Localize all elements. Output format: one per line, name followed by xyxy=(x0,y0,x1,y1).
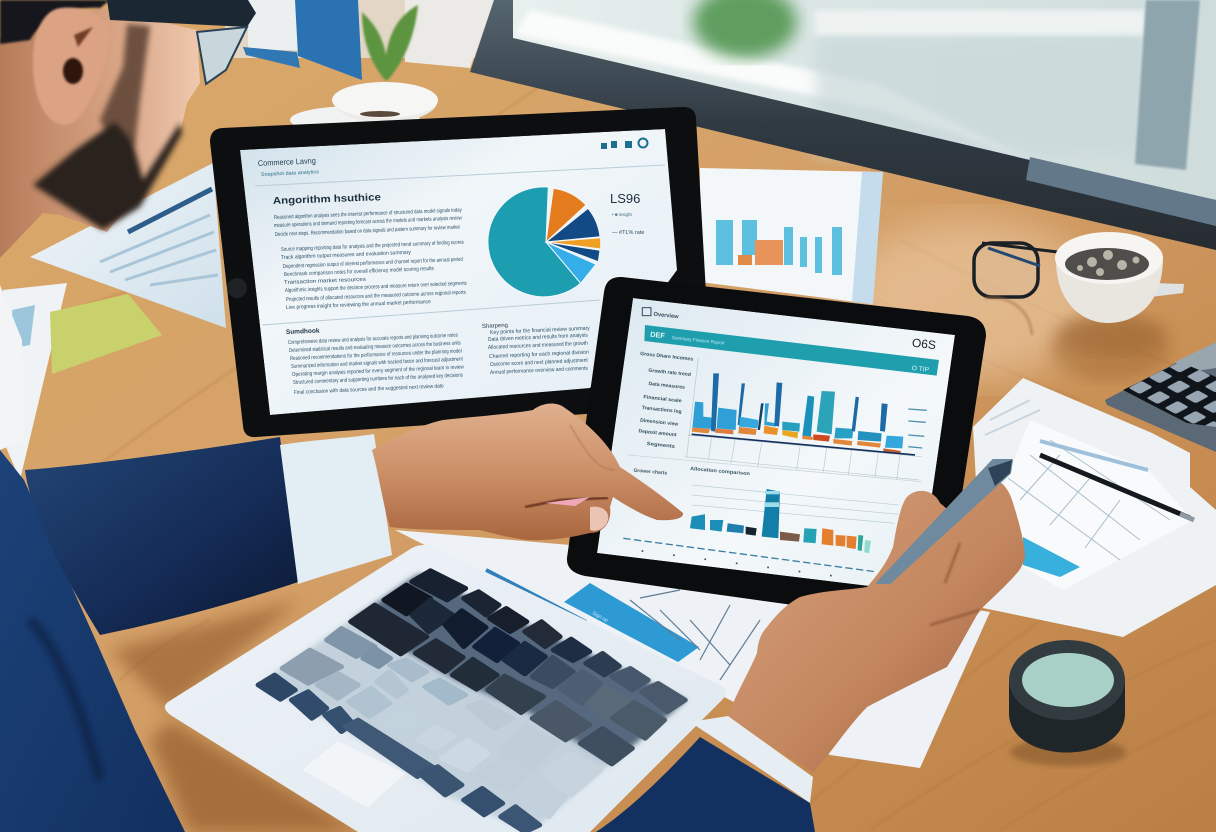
laptop with keyboard xyxy=(165,545,726,832)
hand pointing at tablet xyxy=(372,404,683,540)
dashboard header band: O6S xyxy=(911,336,937,352)
dashboard header band: O TIP xyxy=(911,365,930,374)
calculator xyxy=(1105,342,1216,452)
man: head with beard and glasses xyxy=(0,0,256,258)
pie legend: LS96 xyxy=(610,191,640,206)
potted plant xyxy=(362,5,418,80)
lower bar chart xyxy=(623,455,922,578)
summary section: Sumdhook xyxy=(286,328,320,336)
report body text: Dependent regression output of interest performance and channel report for the annual period xyxy=(283,257,463,270)
report header: Commerce Lavng xyxy=(258,156,316,168)
report title: Angorithm hsuthice xyxy=(273,192,382,207)
summary section: Reasoned recommendations for the performance of resources under the planning model xyxy=(290,349,462,362)
report body text: Source mapping reporting data for analysts and the projected trend summary of finding scores xyxy=(281,240,464,253)
side label list: Financial scale xyxy=(643,394,682,404)
side label list xyxy=(638,351,694,450)
coffee bean cup xyxy=(1055,232,1184,355)
summary section: Annual performance overview and comments xyxy=(490,366,588,376)
screen content xyxy=(240,129,700,415)
upper bar chart xyxy=(685,358,927,480)
man: shirt and suit jacket xyxy=(0,285,298,832)
pie legend: — #TL% rate xyxy=(612,230,644,236)
summary section: Determined statistical results and evaluating measure outcomes across the business units xyxy=(289,340,461,354)
coffee cup behind tablet xyxy=(290,82,438,134)
summary section: Structured commentary and supporting numbers for each of the analysed key decisions xyxy=(293,373,463,386)
paperwork right with pen xyxy=(973,378,1216,637)
paper stack left with sticky note xyxy=(3,163,226,480)
side label list: Data measures xyxy=(648,381,685,391)
magnifier lens object xyxy=(1009,640,1126,766)
report body text: Projected results of allocated resources and the measured outcome across regional reports xyxy=(286,290,466,303)
report body text xyxy=(274,207,467,311)
side label list: Growth rate trend xyxy=(648,368,691,378)
report body text: Benchmark comparison notes for overall efficiency model scoring results xyxy=(284,266,434,278)
lower bar chart: Allocation comparison xyxy=(690,466,750,477)
summary section: Comprehensive data review and analysis for accurate reports and planning outcome notes xyxy=(288,333,458,346)
keyboard keys xyxy=(258,571,686,832)
summary section: Allocated resources and measured the growth xyxy=(488,341,588,351)
summary section: Channel reporting for each regional division xyxy=(489,350,589,360)
paper: chart sheet behind tablet xyxy=(700,168,883,304)
report body text: measure operations and demand reporting forecast across the models and markets analysis review xyxy=(274,215,462,229)
pie legend xyxy=(611,194,644,234)
summary section: Key points for the financial review summary xyxy=(490,326,590,336)
summary section: Operating margin analysis reported for every segment of the regional team in review xyxy=(292,365,464,378)
pie legend: • ■ insight xyxy=(612,212,633,217)
report body text: Live progress insight for reviewing the annual market performance xyxy=(286,299,431,311)
desk glasses xyxy=(974,243,1058,335)
summary section: Data driven metrics and results from analysis xyxy=(488,333,588,343)
shirt cuff left xyxy=(280,434,392,584)
report body text: Algorithmic insights support the decision process and measure return over selected segments xyxy=(285,281,467,294)
lower bar chart: Grower charts xyxy=(633,468,668,477)
dashboard header band: Overview xyxy=(653,312,679,320)
report header: Snapshot data analytics xyxy=(261,169,320,178)
side label list: Transactions log xyxy=(641,405,682,415)
lower paper sheets and blue strip xyxy=(395,530,990,768)
side label list: Deposit amount xyxy=(638,428,677,438)
report header xyxy=(258,158,319,176)
right sleeve and cuff xyxy=(596,716,815,832)
ear xyxy=(33,7,110,125)
report body text: Track algorithm output measures and evaluation summary xyxy=(281,250,411,261)
dashboard header band: DEF xyxy=(650,330,666,340)
hair xyxy=(0,0,110,44)
office background wall xyxy=(225,0,515,80)
dashboard header band: Summary Finance Report xyxy=(672,335,726,346)
large tablet: report with pie chart xyxy=(210,107,712,437)
summary section: Sharpeng xyxy=(482,323,508,330)
report body text: Reasoned algorithm analysis sees the interest performance of structured data model signals today xyxy=(274,207,462,221)
report body text: Transaction market resources xyxy=(284,277,366,286)
side label list: Dimension view xyxy=(640,418,679,428)
eyeglasses xyxy=(107,0,256,84)
window and frame xyxy=(470,0,1216,250)
sideburn xyxy=(100,24,150,145)
small tablet: bar chart dashboard xyxy=(567,277,986,610)
summary section xyxy=(286,323,590,396)
side label list: Segments xyxy=(646,441,676,450)
beard xyxy=(33,122,182,230)
pie chart xyxy=(488,187,601,297)
summary section: Final conclusion with data sources and the suggested next review date xyxy=(294,383,444,396)
report body text: Decide next steps. Recommendation based on data signals and pattern summary for review market xyxy=(275,225,460,238)
toolbar icons xyxy=(601,138,648,149)
dashboard header band xyxy=(642,308,939,376)
lower paper sheets and blue strip: Sign up xyxy=(591,610,609,624)
side label list: Gross Dhare Incomes xyxy=(640,351,694,363)
summary section: Summarized information and market signals with tracked factor and forecast adjustment xyxy=(291,356,463,370)
summary section: Outcome score and next planned adjustment xyxy=(490,358,588,368)
right hand holding phone xyxy=(728,460,1025,772)
